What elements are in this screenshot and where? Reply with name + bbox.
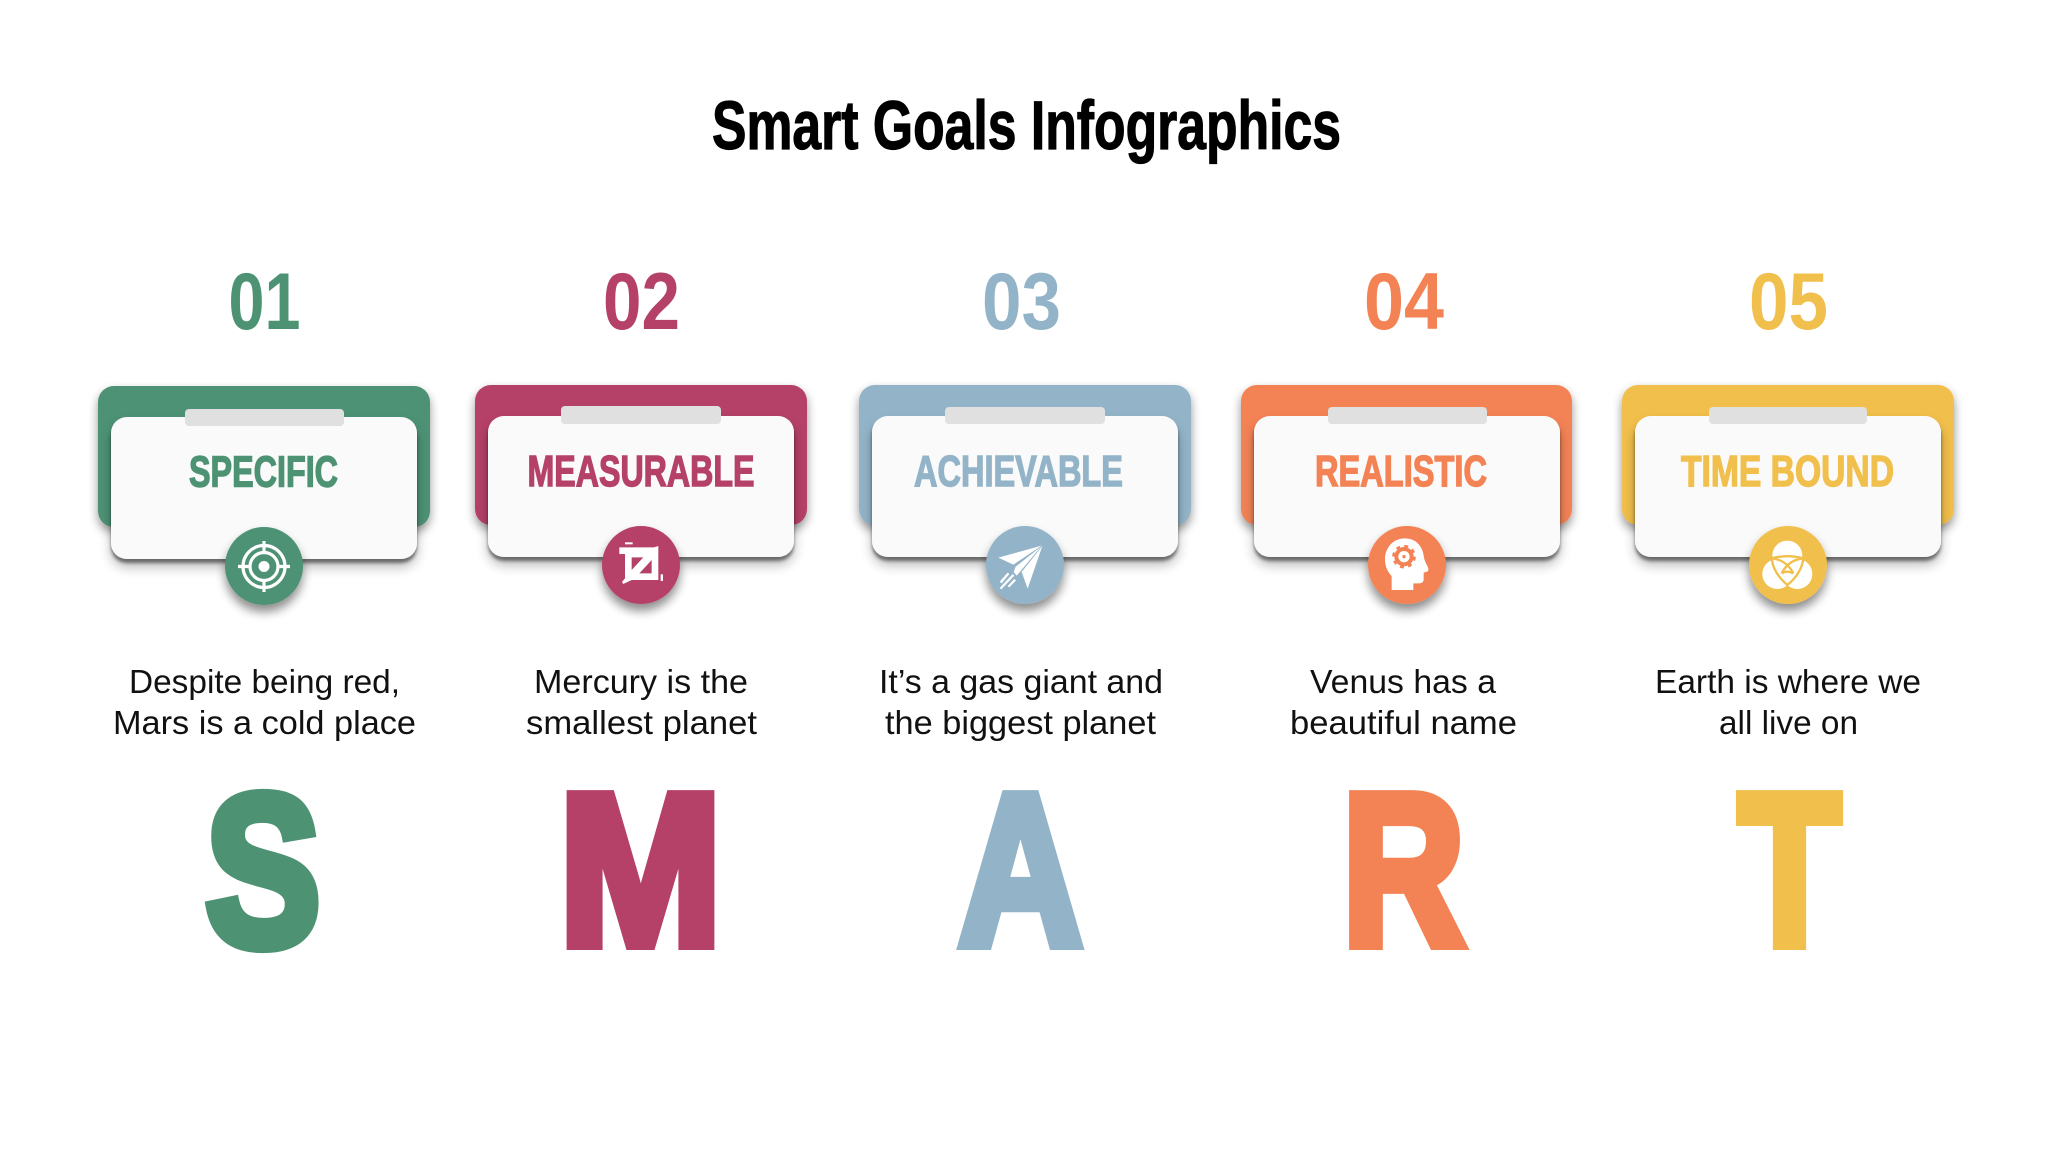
title: Smart Goals Infographics — [712, 87, 1341, 164]
card back panel — [98, 386, 430, 527]
number 03: 03 — [982, 257, 1061, 347]
card front panel — [1635, 416, 1941, 557]
card label: REALISTIC — [1315, 447, 1487, 496]
big letter S: S — [206, 750, 320, 991]
description: Despite being red, — [129, 663, 400, 700]
card front panel — [872, 416, 1178, 557]
column: measurable — [475, 257, 807, 990]
card back panel — [1622, 385, 1954, 525]
card: specific — [98, 386, 430, 559]
card tab — [561, 406, 721, 424]
number 05: 05 — [1749, 257, 1828, 347]
number 01: 01 — [228, 257, 300, 347]
card tab — [1709, 407, 1867, 424]
description: beautiful name — [1290, 704, 1517, 741]
column: achievable — [859, 257, 1191, 990]
column: specific — [98, 257, 430, 991]
description: It’s a gas giant and — [879, 663, 1163, 700]
icon: overlapping circles — [1749, 526, 1827, 604]
card tab — [1328, 407, 1487, 424]
icon: head with gear — [1368, 526, 1446, 604]
number 04: 04 — [1364, 257, 1444, 347]
card label: SPECIFIC — [189, 448, 338, 496]
big letter A: A — [959, 749, 1082, 990]
card label: TIME BOUND — [1681, 447, 1894, 496]
card: realistic — [1241, 385, 1572, 557]
description: Venus has a — [1310, 663, 1497, 700]
card label: ACHIEVABLE — [914, 447, 1123, 496]
card front panel — [488, 416, 794, 557]
description: Earth is where we — [1655, 663, 1921, 700]
description: Mercury is the — [534, 663, 748, 700]
card: measurable — [475, 385, 807, 557]
description: Mars is a cold place — [113, 704, 416, 741]
description: the biggest planet — [885, 704, 1156, 741]
card back panel — [475, 385, 807, 525]
icon: crop — [602, 526, 680, 604]
card: achievable — [859, 385, 1191, 557]
card front panel — [111, 417, 417, 559]
card front panel — [1254, 416, 1560, 557]
card: time bound — [1622, 385, 1954, 557]
card label: MEASURABLE — [528, 447, 754, 496]
big letter R: R — [1342, 749, 1464, 990]
column: time bound — [1622, 257, 1954, 990]
card tab — [185, 409, 344, 426]
icon: paper plane — [986, 526, 1064, 604]
column: realistic — [1241, 257, 1572, 990]
big letter T: T — [1739, 749, 1840, 990]
big letter M: M — [559, 749, 722, 990]
description: all live on — [1719, 704, 1858, 741]
card tab — [945, 407, 1105, 424]
description: smallest planet — [526, 704, 757, 741]
number 02: 02 — [603, 257, 680, 347]
icon: target — [225, 527, 303, 605]
card back panel — [859, 385, 1191, 525]
card back panel — [1241, 385, 1572, 525]
